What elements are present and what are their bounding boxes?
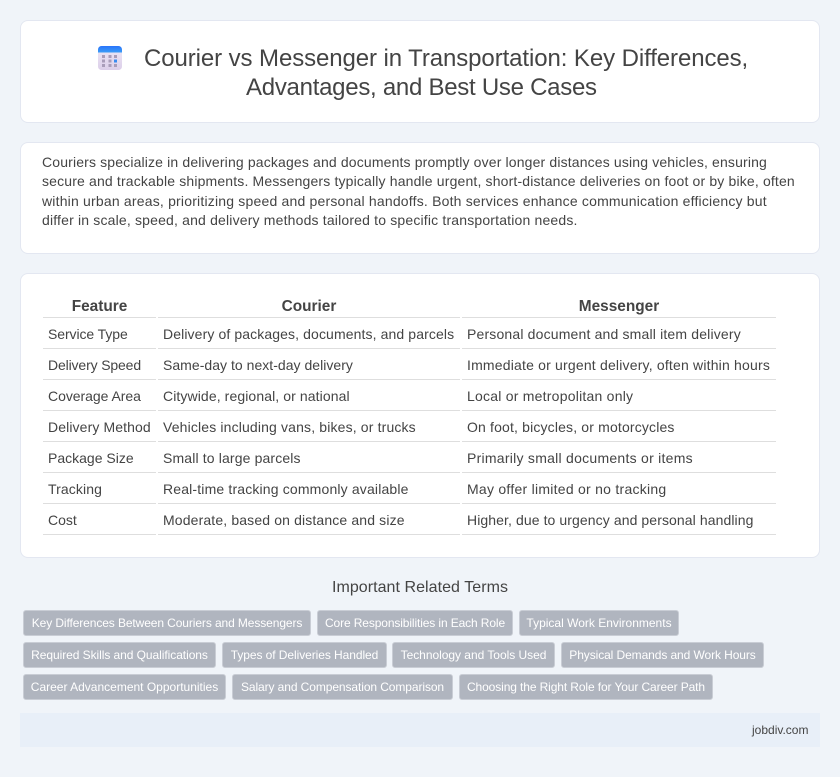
footer bar: [20, 713, 820, 747]
tags: related terms: Typical Work Environments: [526, 616, 672, 630]
comparison table: Primarily small documents or items: [467, 450, 693, 466]
comparison table: Local or metropolitan only: [467, 388, 633, 404]
comparison table: May offer limited or no tracking: [467, 481, 666, 497]
comparison table: Cost: [48, 512, 77, 528]
comparison table: Package Size: [48, 450, 134, 466]
icon: calendar: [98, 46, 122, 70]
tags: related terms: Technology and Tools Used: [401, 648, 546, 662]
title: [144, 45, 748, 101]
comparison table: Delivery Speed: [48, 357, 141, 373]
comparison table: Feature: [72, 298, 127, 315]
comparison table: [43, 298, 776, 535]
comparison table: Delivery of packages, documents, and parcels: [163, 326, 454, 342]
comparison table: Moderate, based on distance and size: [163, 512, 405, 528]
tags: related terms: Key Differences Between Couriers and Messengers: [32, 616, 302, 630]
footer credit: jobdiv.com: [752, 723, 808, 737]
panel: intro: [20, 142, 820, 254]
comparison table: Delivery Method: [48, 419, 151, 435]
comparison table: Service Type: [48, 326, 128, 342]
comparison table: Coverage Area: [48, 388, 141, 404]
comparison table: Messenger: [579, 298, 659, 315]
header card: [20, 20, 820, 123]
tags: related terms: Physical Demands and Work Hours: [569, 648, 756, 662]
tags: related terms: Choosing the Right Role for Your Career Path: [467, 680, 705, 694]
comparison table: Immediate or urgent delivery, often within hours: [467, 357, 770, 373]
comparison table: Personal document and small item delivery: [467, 326, 741, 342]
comparison table: Citywide, regional, or national: [163, 388, 350, 404]
title: Advantages, and Best Use Cases: [246, 74, 597, 101]
tags: related terms: Required Skills and Qualifications: [31, 648, 208, 662]
tags: related terms: Salary and Compensation Comparison: [241, 680, 444, 694]
intro text: within urban areas, prioritizing speed and personal handoffs. Both services enhance communication efficiency but: [42, 193, 767, 209]
tags: related terms: Core Responsibilities in Each Role: [325, 616, 505, 630]
comparison table: Real-time tracking commonly available: [163, 481, 409, 497]
comparison table: Small to large parcels: [163, 450, 301, 466]
tags: related terms: Types of Deliveries Handled: [231, 648, 378, 662]
heading: related terms: Important Related Terms: [332, 579, 508, 596]
panel: comparison table: [20, 273, 820, 558]
tags: related terms: [23, 610, 764, 700]
intro text: Couriers specialize in delivering packages and documents promptly over longer distances using vehicles, ensuring: [42, 154, 767, 170]
intro text: [42, 154, 795, 228]
comparison table: Vehicles including vans, bikes, or trucks: [163, 419, 416, 435]
comparison table: Higher, due to urgency and personal handling: [467, 512, 754, 528]
comparison table: Courier: [282, 298, 336, 315]
comparison table: Tracking: [48, 481, 102, 497]
comparison table: On foot, bicycles, or motorcycles: [467, 419, 675, 435]
intro text: secure and trackable shipments. Messengers typically handle urgent, short-distance deliveries on foot or by bike, often: [42, 173, 795, 189]
intro text: differ in scale, speed, and delivery methods tailored to specific transportation needs.: [42, 212, 578, 228]
title: Courier vs Messenger in Transportation: Key Differences,: [144, 45, 748, 72]
comparison table: Same-day to next-day delivery: [163, 357, 353, 373]
tags: related terms: Career Advancement Opportunities: [31, 680, 218, 694]
